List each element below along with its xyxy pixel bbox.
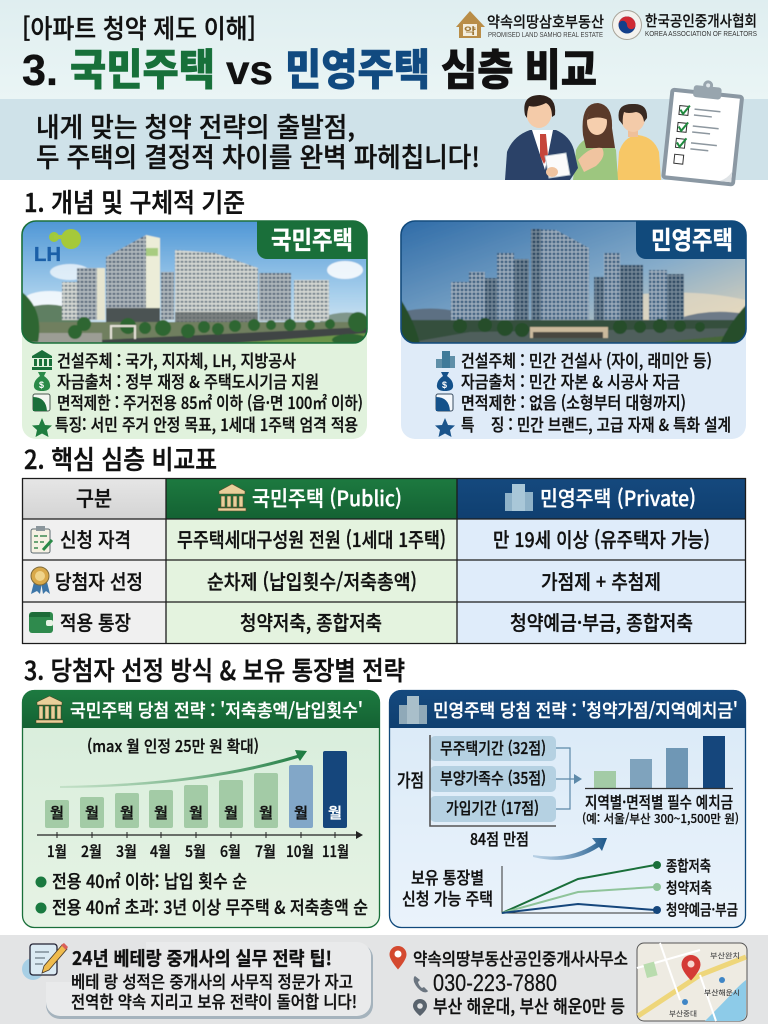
icon: note and pencil: [22, 943, 68, 980]
icon: money bag: $: [39, 380, 44, 390]
icon: area plan: [33, 394, 50, 411]
bar chart: monthly payments: 월: [259, 802, 273, 823]
icon: consultant and couple: [505, 95, 661, 180]
tab: 민영주택: 민영주택: [651, 221, 733, 257]
diagram: score items: 가점: [397, 767, 424, 793]
photo: LH apartment complex: [22, 221, 368, 346]
map labels: 부산완치: [710, 951, 740, 961]
logo: LH: LH: [34, 244, 61, 266]
diagram: score items: [397, 735, 556, 850]
table header row: 구분: [76, 483, 112, 513]
icon: towers: [505, 484, 533, 511]
chart label: 신청 가능 주택: [402, 885, 493, 910]
main title: 민영주택: [285, 36, 430, 98]
map labels: [669, 951, 740, 1019]
icon: towers: [399, 696, 427, 724]
contact information: [390, 945, 628, 1019]
table row: eligibility: 무주택세대구성원 전원 (1세대 1주택): [177, 524, 446, 553]
table row: winner selection: [31, 566, 661, 595]
list: public housing criteria: [32, 347, 363, 437]
section 2 heading: 2. 핵심 심층 비교표: [24, 440, 217, 477]
bullet: up to 40 sqm: 전용 40㎡ 이하: 납입 횟수 순: [52, 868, 247, 894]
tab: 국민주택: 국민주택: [271, 221, 353, 257]
man in yellow: [617, 135, 661, 180]
contact information: 부산 해운대, 부산 해운0만 등: [433, 993, 625, 1019]
banner text: 내게 맞는 청약 전략의 출발점,: [36, 106, 355, 145]
table header row: 국민주택 (Public): [252, 483, 402, 513]
note: monthly recognition cap: (max 월 인정 25만 원 확대): [87, 733, 259, 757]
callout: agent tip: 베테 랑 성적은 중개사의 사무직 정문가 자고: [71, 968, 353, 993]
list: public housing criteria: 자금출처 : 정부 재정 & 주택도시기금 지원: [57, 368, 319, 393]
timeline axis: 5월: [185, 840, 206, 862]
table row: savings account: 적용 통장: [60, 607, 131, 636]
icon: money bag: [437, 372, 453, 391]
timeline axis: 2월: [81, 840, 102, 862]
timeline axis: 7월: [255, 840, 276, 862]
icon: bank: [32, 350, 52, 370]
bar chart: monthly payments: 월: [294, 802, 308, 823]
bar chart: monthly payments: 월: [50, 802, 64, 823]
comparison table: [22, 478, 746, 644]
map labels: 부산해운시: [704, 988, 740, 998]
table row: eligibility: 신청 자격: [60, 524, 131, 553]
table row: winner selection: 당첨자 선정: [55, 566, 143, 595]
bar chart: required deposits: 지역별·면적별 필수 예치금: [585, 789, 733, 813]
callout: agent tip: 전역한 약속 지리고 보유 전략이 돌어합 니다!: [71, 988, 357, 1013]
callout: agent tip: 24년 베테랑 중개사의 실무 전략 팁!: [72, 944, 332, 971]
table header row: 민영주택 (Private): [540, 483, 696, 513]
arrow: curved to deposits: [533, 838, 607, 860]
arrow: score bracket: [556, 748, 582, 809]
main title: vs: [226, 47, 273, 93]
icon: money bag: $: [442, 380, 447, 390]
line chart: accounts: [502, 855, 738, 920]
list: public housing criteria: 특징: 서민 주거 안정 목표, 1세대 1주택 엄격 적용: [55, 411, 358, 436]
bar chart: monthly payments: 월: [85, 802, 99, 823]
logo: korea association of realtors: [612, 10, 757, 40]
list: private housing criteria: 자금출처 : 민간 자본 & 시공사 자금: [461, 368, 680, 393]
list: public housing criteria: 면적제한 : 주거전용 85㎡ 이하 (읍·면 100㎡ 이하): [57, 389, 363, 414]
bar chart: required deposits: (예: 서울/부산 300~1,500만 원): [582, 810, 739, 827]
icon: medal: [31, 567, 50, 594]
table row: eligibility: [31, 524, 710, 553]
chart label: 보유 통장별: [411, 864, 484, 889]
list: private housing criteria: [435, 347, 731, 437]
diagram: score items: 가입기간 (17점): [446, 795, 539, 819]
diagram: score items: 무주택기간 (32점): [440, 735, 546, 759]
icon: star: [435, 418, 455, 437]
line chart: accounts: 종합저축: [666, 855, 711, 876]
footer: [0, 935, 768, 1024]
contact information: 030-223-7880: [433, 970, 557, 997]
section 1 heading: 1. 개념 및 구체적 기준: [24, 183, 245, 220]
header band: [0, 0, 768, 99]
panel header: [22, 690, 380, 728]
subtitle tag: [아파트 청약 제도 이해]: [22, 9, 256, 46]
banner text: [36, 106, 480, 175]
list: private housing criteria: 특 징 : 민간 브랜드, 고급 자재 & 특화 설계: [461, 411, 731, 436]
timeline axis: 3월: [116, 840, 137, 862]
timeline axis: [37, 831, 363, 862]
panel: public housing strategy: [22, 690, 380, 928]
icon: area plan: [436, 394, 453, 411]
main title: [22, 36, 597, 98]
panel: private housing concept: [401, 221, 746, 439]
panel header: 국민주택 당첨 전략 : '저축총액/납입횟수': [70, 697, 363, 723]
bar chart: monthly payments: 월: [120, 802, 134, 823]
list: private housing criteria: 면적제한 : 없음 (소형부터 대형까지): [461, 389, 686, 414]
list: private housing criteria: 건설주체 : 민간 건설사 (자이, 래미안 등): [461, 347, 712, 372]
table row: eligibility: 만 19세 이상 (유주택자 가능): [493, 524, 710, 553]
icon: star: [32, 418, 52, 437]
icon: location pin red: [390, 946, 406, 970]
table row: winner selection: 가점제 + 추첨제: [541, 566, 661, 595]
timeline axis: 1월: [47, 840, 67, 862]
logo: promised land realty: 약속의땅삼호부동산: [487, 11, 604, 32]
logo: promised land realty: PROMISED LAND SAMHO REAL ESTATE: [488, 30, 603, 39]
map labels: 부산중대: [669, 1009, 697, 1019]
timeline axis: 11월: [322, 840, 349, 862]
table row: savings account: 청약저축, 종합저축: [240, 607, 382, 636]
icon: towers: [436, 351, 455, 368]
bar chart: monthly payments: [37, 750, 363, 862]
icon: money bag: [34, 372, 50, 391]
timeline axis: 4월: [150, 840, 171, 862]
icon: location pin gray: [413, 999, 427, 1016]
map pin: [682, 955, 700, 980]
icon: bank: [218, 484, 246, 511]
icon: wallet: [29, 612, 53, 633]
bar chart: monthly payments: 월: [154, 802, 168, 823]
banner text: 두 주택의 결정적 차이를 완벽 파헤칩니다!: [36, 136, 480, 175]
photo: private apartment complex: [401, 221, 746, 344]
list: public housing criteria: 건설주체 : 국가, 지자체, LH, 지방공사: [57, 347, 296, 372]
panel header: [389, 690, 746, 728]
logo: LH: [34, 229, 81, 266]
line chart: accounts: 청약예금·부금: [666, 899, 738, 920]
panel: public housing concept: [22, 221, 368, 439]
logo: promised land realty: [456, 11, 604, 39]
main title: 심층 비교: [441, 36, 597, 98]
banner: [0, 77, 768, 187]
panel: private housing strategy: [389, 690, 746, 928]
timeline axis: 10월: [286, 840, 314, 862]
icon: phone: [414, 976, 428, 992]
diagram: score items: 84점 만점: [470, 826, 529, 850]
map: [637, 943, 747, 1021]
logo: promised land realty: 약: [464, 25, 476, 36]
chart label: [402, 864, 493, 910]
bullet: over 40 sqm: 전용 40㎡ 초과: 3년 이상 무주택 & 저축총액 순: [52, 894, 368, 920]
logo: korea association of realtors: 한국공인중개사협회: [645, 10, 757, 31]
icon: clipboard: [31, 526, 52, 553]
bar chart: monthly payments: 월: [224, 802, 238, 823]
timeline axis: 6월: [220, 840, 241, 862]
arrow: upward trend: [60, 750, 307, 788]
table row: savings account: [29, 607, 693, 636]
bar chart: monthly payments: 월: [189, 802, 203, 823]
line chart: accounts: 청약저축: [666, 877, 712, 898]
man in suit: [505, 130, 578, 180]
icon: clipboard checklist: [661, 77, 745, 187]
table row: winner selection: 순차제 (납입횟수/저축총액): [207, 566, 417, 595]
callout: agent tip: [22, 942, 373, 1019]
main title: 국민주택: [70, 36, 215, 98]
icon: bank: [36, 696, 63, 723]
table row: savings account: 청약예금·부금, 종합저축: [510, 607, 693, 636]
woman in green: [573, 137, 618, 180]
bar chart: required deposits: [582, 736, 739, 827]
panel header: 민영주택 당첨 전략 : '청약가점/지역예치금': [433, 697, 738, 723]
main title: 3.: [22, 46, 58, 95]
diagram: score items: 부양가족수 (35점): [440, 765, 546, 789]
table header row: [76, 483, 696, 513]
section 3 heading: 3. 당첨자 선정 방식 & 보유 통장별 전략: [24, 651, 405, 688]
contact information: 약속의땅부동산공인중개사사무소: [413, 945, 628, 970]
bar chart: monthly payments: 월: [328, 802, 342, 823]
